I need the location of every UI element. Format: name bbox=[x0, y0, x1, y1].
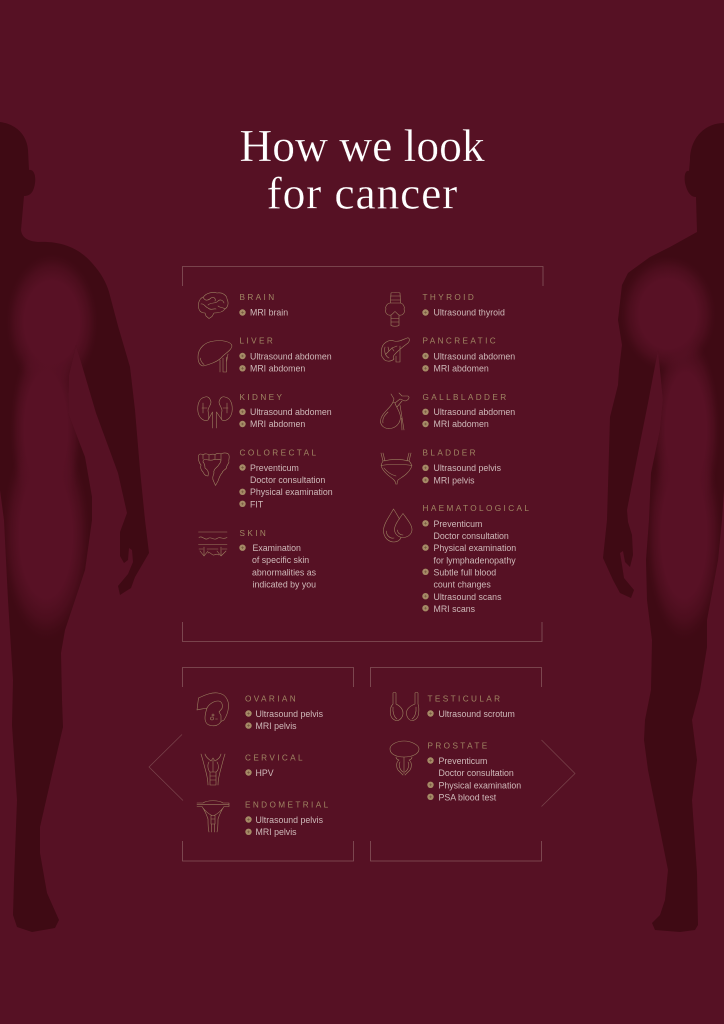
brain: BRAIN bbox=[240, 293, 277, 302]
haematological bbox=[384, 504, 531, 614]
endometrial: MRI pelvis bbox=[256, 827, 297, 837]
panel: main organs bbox=[182, 266, 543, 642]
ovarian: Ultrasound pelvis bbox=[256, 709, 324, 719]
icon: bladder bbox=[381, 453, 412, 484]
haematological: for lymphadenopathy bbox=[434, 555, 516, 565]
skin: of specific skin bbox=[252, 555, 309, 565]
cervical: HPV bbox=[256, 768, 274, 778]
gallbladder: GALLBLADDER bbox=[422, 393, 509, 402]
panel: male organs bbox=[370, 668, 575, 861]
icon: thyroid bbox=[386, 292, 404, 326]
title: for cancer bbox=[267, 168, 458, 218]
cervical: CERVICAL bbox=[245, 754, 305, 762]
pancreatic: Ultrasound abdomen bbox=[434, 352, 515, 362]
icon: liver bbox=[198, 341, 232, 372]
icon: cervix bbox=[201, 754, 225, 785]
skin bbox=[198, 529, 317, 590]
thyroid: THYROID bbox=[422, 293, 476, 302]
colorectal: Physical examination bbox=[250, 487, 333, 497]
haematological: HAEMATOLOGICAL bbox=[422, 504, 531, 513]
bladder: MRI pelvis bbox=[434, 475, 475, 485]
testicular: TESTICULAR bbox=[428, 694, 502, 704]
ovarian: MRI pelvis bbox=[256, 721, 297, 731]
haematological: MRI scans bbox=[434, 604, 476, 614]
colorectal: COLORECTAL bbox=[240, 448, 318, 458]
title bbox=[239, 120, 485, 218]
ovarian: OVARIAN bbox=[245, 694, 298, 704]
colorectal: FIT bbox=[250, 499, 264, 509]
gallbladder: Ultrasound abdomen bbox=[434, 407, 515, 417]
icon: skin layers bbox=[198, 532, 227, 556]
icon: brain bbox=[198, 292, 228, 318]
icon: kidneys bbox=[198, 397, 232, 428]
icon: pancreas bbox=[381, 338, 409, 362]
figure: right body silhouette bbox=[603, 123, 724, 932]
figure: left body silhouette bbox=[0, 110, 160, 940]
colorectal: Preventicum bbox=[250, 463, 299, 473]
pancreatic bbox=[381, 337, 515, 374]
pancreatic: MRI abdomen bbox=[434, 364, 489, 374]
gallbladder bbox=[380, 393, 515, 430]
ovarian bbox=[197, 693, 324, 731]
colorectal bbox=[198, 448, 333, 509]
arrow: right bbox=[542, 740, 575, 806]
haematological: Doctor consultation bbox=[434, 531, 509, 541]
thyroid: Ultrasound thyroid bbox=[434, 308, 505, 318]
skin: Examination bbox=[252, 543, 301, 553]
haematological: Ultrasound scans bbox=[434, 592, 502, 602]
haematological: count changes bbox=[434, 580, 491, 590]
skin: indicated by you bbox=[252, 580, 316, 590]
haematological: Preventicum bbox=[434, 519, 482, 529]
testicular bbox=[390, 692, 515, 720]
haematological: Physical examination bbox=[434, 543, 516, 553]
skin: SKIN bbox=[240, 529, 268, 538]
endometrial bbox=[197, 800, 331, 837]
brain: MRI brain bbox=[250, 308, 288, 318]
prostate: PROSTATE bbox=[428, 742, 490, 750]
icon: testes bbox=[390, 692, 419, 720]
cervical bbox=[201, 754, 305, 785]
liver bbox=[198, 337, 332, 374]
gallbladder: MRI abdomen bbox=[434, 419, 489, 429]
skin: abnormalities as bbox=[252, 568, 317, 578]
kidney: Ultrasound abdomen bbox=[250, 407, 332, 417]
icon: blood drops bbox=[384, 509, 412, 542]
kidney: MRI abdomen bbox=[250, 419, 305, 429]
arrow: left bbox=[149, 734, 183, 800]
title: How we look bbox=[239, 120, 485, 171]
pancreatic: PANCREATIC bbox=[422, 337, 498, 346]
icon: ovary bbox=[197, 693, 229, 726]
testicular: Ultrasound scrotum bbox=[438, 709, 515, 719]
prostate: PSA blood test bbox=[438, 792, 497, 802]
brain bbox=[198, 292, 288, 318]
kidney: KIDNEY bbox=[240, 393, 284, 402]
endometrial: Ultrasound pelvis bbox=[256, 815, 324, 825]
liver: Ultrasound abdomen bbox=[250, 352, 332, 362]
icon: uterus bbox=[197, 801, 229, 832]
bladder: BLADDER bbox=[422, 448, 478, 458]
icon: gallbladder bbox=[380, 393, 409, 430]
prostate: Physical examination bbox=[438, 780, 521, 790]
kidney bbox=[198, 393, 332, 429]
liver: LIVER bbox=[240, 337, 275, 346]
colorectal: Doctor consultation bbox=[250, 475, 325, 485]
prostate: Doctor consultation bbox=[438, 768, 514, 778]
thyroid bbox=[386, 292, 505, 326]
panel: female organs bbox=[149, 668, 354, 861]
prostate: Preventicum bbox=[438, 756, 487, 766]
bladder: Ultrasound pelvis bbox=[434, 463, 502, 473]
liver: MRI abdomen bbox=[250, 364, 305, 374]
icon: prostate bbox=[390, 741, 419, 775]
icon: colon bbox=[198, 453, 229, 486]
endometrial: ENDOMETRIAL bbox=[245, 800, 331, 810]
haematological: Subtle full blood bbox=[434, 568, 496, 578]
prostate bbox=[390, 741, 521, 802]
bladder bbox=[381, 448, 502, 485]
